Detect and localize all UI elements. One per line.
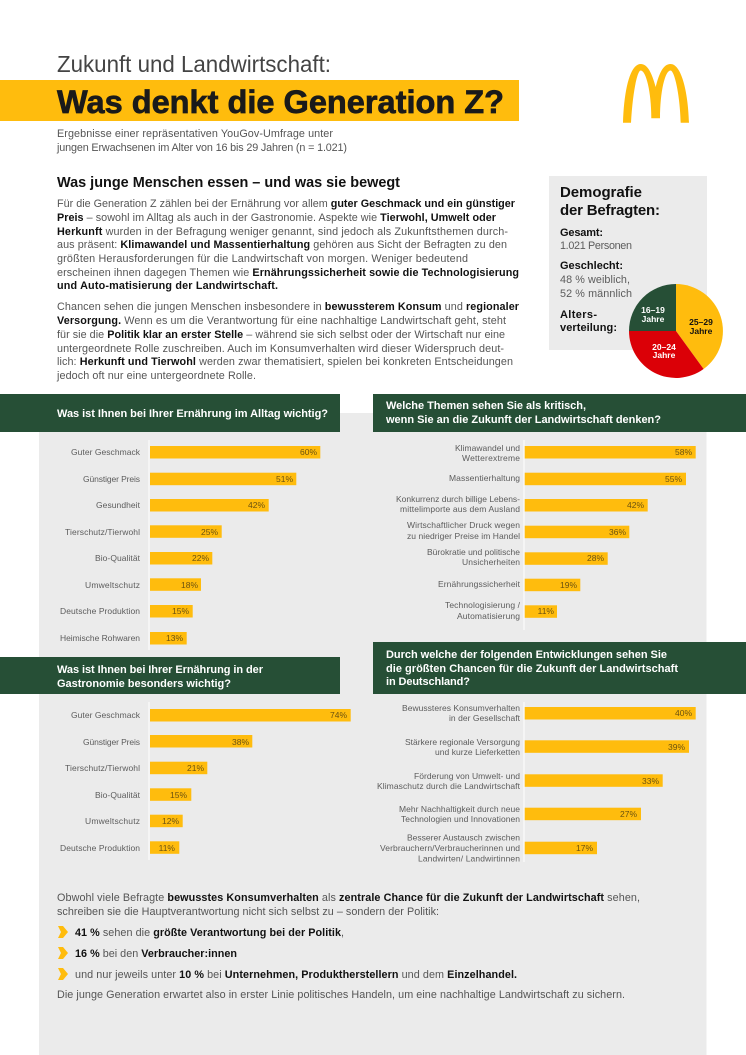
bar chart: kritische Themen: Automatisierung	[457, 611, 520, 621]
panel: demografie: verteilung:	[560, 322, 617, 334]
intro text block: Preis – sowohl im Alltag als auch in der Gastronomie. Aspekte wie Tierwohl, Umwelt oder	[57, 212, 497, 224]
bar chart: alltag: 42%	[248, 500, 265, 510]
bar chart: gastronomie: 11%	[159, 843, 175, 853]
panel: demografie: 52 % männlich	[560, 288, 632, 300]
bar chart: kritische Themen: Unsicherheiten	[462, 557, 520, 567]
conclusion text block: Obwohl viele Befragte bewusstes Konsumverhalten als zentrale Chance für die Zukunft der Landwirtschaft sehen,	[57, 892, 640, 904]
bar chart: chancen: Klimaschutz durch die Landwirtschaft	[377, 781, 521, 791]
heading: gastronomie: Was ist Ihnen bei Ihrer Ernährung in der	[57, 664, 264, 676]
bar chart: kritische Themen: Konkurrenz durch billige Lebens-	[396, 494, 520, 504]
icon: McDonald's arches logo	[623, 64, 689, 123]
pie chart: altersverteilung: 25–29	[689, 317, 713, 327]
panel: demografie: Geschlecht:	[560, 260, 623, 272]
pie chart: altersverteilung	[629, 284, 723, 378]
bar chart: alltag: 60%	[300, 447, 317, 457]
bar chart: alltag: Deutsche Produktion	[60, 606, 140, 616]
bar chart: gastronomie: Deutsche Produktion	[60, 843, 140, 853]
gray background panel	[39, 413, 706, 1055]
heading: kritische Themen: wenn Sie an die Zukunft der Landwirtschaft denken?	[385, 414, 661, 426]
heading: chancen: in Deutschland?	[386, 676, 470, 688]
intro text block: jedoch oft nur eine untergeordnete Rolle.	[56, 370, 256, 382]
bar chart: kritische Themen: 55%	[665, 474, 682, 484]
bar chart: kritische Themen: Technologisierung /	[445, 600, 521, 610]
bar chart: gastronomie: Umweltschutz	[85, 816, 140, 826]
subtitle: jungen Erwachsenen im Alter von 16 bis 29 Jahren (n = 1.021)	[56, 142, 347, 154]
bar chart: kritische Themen: Wetterextreme	[462, 453, 520, 463]
pie chart: altersverteilung: Jahre	[690, 326, 713, 336]
bar chart: gastronomie: 74%	[330, 710, 347, 720]
subtitle	[56, 128, 347, 154]
panel: demografie: 1.021 Personen	[560, 240, 632, 252]
bar chart: kritische Themen: Wirtschaftlicher Druck wegen	[407, 520, 520, 530]
bar chart: alltag: 25%	[201, 527, 218, 537]
pie chart: altersverteilung: 20–24	[652, 342, 676, 352]
bar chart: alltag: Tierschutz/Tierwohl	[65, 527, 140, 537]
pie chart: altersverteilung: Jahre	[642, 314, 665, 324]
panel: demografie: Demografie	[560, 184, 642, 201]
bar chart: kritische Themen: 42%	[627, 500, 644, 510]
bar chart: alltag: Günstiger Preis	[83, 474, 140, 484]
bar chart: gastronomie: 38%	[232, 737, 249, 747]
intro text block: Herkunft wurden in der Befragung weniger genannt, sind jedoch als Zukunftsthemen durch-	[57, 226, 508, 238]
bar chart: gastronomie: 21%	[187, 763, 204, 773]
bar chart: kritische Themen: Massentierhaltung	[449, 473, 520, 483]
bar chart: gastronomie: 12%	[162, 816, 179, 826]
conclusion text block: 41 % sehen die größte Verantwortung bei der Politik,	[75, 927, 344, 939]
conclusion text block: Die junge Generation erwartet also in erster Linie politisches Handeln, um eine nachhaltige Landwirtschaft zu sichern.	[57, 989, 625, 1001]
heading: alltag	[0, 394, 340, 432]
panel: demografie: der Befragten:	[560, 202, 660, 219]
bar chart: chancen	[377, 702, 696, 864]
bar chart: alltag: 22%	[192, 553, 209, 563]
bar chart: chancen: 27%	[620, 809, 637, 819]
bar chart: chancen: 33%	[642, 776, 659, 786]
bar chart: alltag: Gesundheit	[96, 500, 141, 510]
bar chart: alltag: Heimische Rohwaren	[60, 633, 140, 643]
bar chart: chancen: Besserer Austausch zwischen	[407, 832, 520, 842]
bar chart: kritische Themen: 19%	[560, 580, 577, 590]
intro text block: Was junge Menschen essen – und was sie bewegt	[57, 175, 400, 191]
pie chart: altersverteilung: Jahre	[653, 350, 676, 360]
bar chart: chancen: Verbrauchern/Verbraucherinnen und	[380, 843, 520, 853]
bar chart: chancen: Landwirten/ Landwirtinnen	[418, 854, 520, 864]
bar chart: chancen: Technologien und Innovationen	[401, 814, 520, 824]
title block	[0, 51, 519, 121]
bar chart: kritische Themen: zu niedriger Preise im Handel	[407, 531, 520, 541]
pie chart: altersverteilung: 16–19	[641, 305, 665, 315]
heading: alltag: Was ist Ihnen bei Ihrer Ernährung im Alltag wichtig?	[57, 408, 328, 420]
intro text block: lich: Herkunft und Tierwohl werden zwar thematisiert, spielen bei konkreten Entscheidungen	[57, 356, 513, 368]
intro text block: aus präsent: Klimawandel und Massentierhaltung gehören aus Sicht der Befragten zu den	[57, 239, 507, 251]
bar chart: alltag: 18%	[181, 580, 198, 590]
bar chart: alltag	[60, 440, 320, 650]
bar chart: kritische Themen: 11%	[538, 606, 554, 616]
panel: demografie: Gesamt:	[560, 227, 603, 239]
heading: chancen: Durch welche der folgenden Entwicklungen sehen Sie	[386, 649, 667, 661]
conclusion text block: und nur jeweils unter 10 % bei Unternehmen, Produktherstellern und dem Einzelhandel.	[75, 969, 517, 981]
bar chart: chancen: 40%	[675, 708, 692, 718]
bar chart: chancen: Stärkere regionale Versorgung	[405, 737, 520, 747]
bar chart: gastronomie: Guter Geschmack	[71, 710, 141, 720]
intro text block: erscheinen ihnen dagegen Themen wie Ernährungssicherheit sowie die Technologisierung	[57, 267, 519, 279]
bar chart: chancen: in der Gesellschaft	[449, 713, 521, 723]
bar chart: chancen: Mehr Nachhaltigkeit durch neue	[399, 804, 520, 814]
bar chart: alltag: Bio-Qualität	[95, 553, 141, 563]
heading: gastronomie: Gastronomie besonders wichtig?	[57, 678, 231, 690]
bar chart: kritische Themen: mittelimporte aus dem Ausland	[400, 504, 520, 514]
title block: Zukunft und Landwirtschaft:	[57, 51, 331, 77]
conclusion text block	[57, 892, 640, 1001]
bar chart: kritische Themen: Klimawandel und	[455, 443, 520, 453]
bar chart: chancen: und kurze Lieferketten	[435, 747, 520, 757]
panel: demografie: Alters-	[560, 309, 597, 321]
bar chart: gastronomie: Tierschutz/Tierwohl	[65, 763, 140, 773]
bar chart: gastronomie: Bio-Qualität	[95, 790, 141, 800]
bar chart: kritische Themen: 36%	[609, 527, 626, 537]
intro text block	[56, 175, 520, 382]
intro text block: größten Herausforderungen für die Landwirtschaft von morgen. Weniger bedeutend	[57, 253, 468, 265]
bar chart: gastronomie: Günstiger Preis	[83, 737, 140, 747]
intro text block: und Auto-matisierung der Landwirtschaft.	[57, 280, 278, 292]
intro text block: Für die Generation Z zählen bei der Ernährung vor allem guter Geschmack und ein günstiger	[57, 198, 516, 210]
bar chart: alltag: Umweltschutz	[85, 580, 140, 590]
subtitle: Ergebnisse einer repräsentativen YouGov-Umfrage unter	[57, 128, 333, 140]
heading: gastronomie	[0, 657, 340, 694]
bar chart: kritische Themen: 28%	[587, 553, 604, 563]
intro text block: für sie die Politik klar an erster Stelle – während sie sich selbst oder der Wirtschaft nur eine	[57, 329, 505, 341]
heading: kritische Themen	[373, 394, 746, 432]
conclusion text block: 16 % bei den Verbraucher:innen	[75, 948, 237, 960]
bar chart: alltag: 15%	[172, 606, 189, 616]
title block: Was denkt die Generation Z?	[57, 84, 504, 120]
bar chart: chancen: Förderung von Umwelt- und	[414, 771, 520, 781]
heading: chancen: die größten Chancen für die Zukunft der Landwirtschaft	[386, 663, 678, 675]
bar chart: kritische Themen: 58%	[675, 447, 692, 457]
bar chart: chancen: Bewussteres Konsumverhalten	[402, 703, 520, 713]
intro text block: Chancen sehen die jungen Menschen insbesondere in bewussterem Konsum und regionaler	[57, 301, 520, 313]
bar chart: kritische Themen	[396, 440, 696, 630]
intro text block: Versorgung. Wenn es um die Verantwortung für eine nachhaltige Landwirtschaft geht, steht	[57, 315, 506, 327]
intro text block: untergeordnete Rolle zuschreiben. Auch im Konsumverhalten wird dieser Widerspruch deut-	[57, 343, 504, 355]
bar chart: alltag: 51%	[276, 474, 293, 484]
bar chart: gastronomie: 15%	[170, 790, 187, 800]
bar chart: alltag: Guter Geschmack	[71, 447, 141, 457]
heading: chancen	[373, 642, 746, 694]
panel: demografie: 48 % weiblich,	[560, 274, 630, 286]
bar chart: kritische Themen: Ernährungssicherheit	[438, 579, 521, 589]
bar chart: chancen: 17%	[576, 843, 593, 853]
panel: demografie	[549, 176, 707, 350]
bar chart: chancen: 39%	[668, 742, 685, 752]
bar chart: kritische Themen: Bürokratie und politische	[427, 547, 520, 557]
bar chart: alltag: 13%	[166, 633, 183, 643]
conclusion text block: schreiben sie die Hauptverantwortung nicht sich selbst zu – sondern der Politik:	[57, 906, 439, 918]
heading: kritische Themen: Welche Themen sehen Sie als kritisch,	[386, 400, 586, 412]
bar chart: gastronomie	[60, 702, 351, 860]
